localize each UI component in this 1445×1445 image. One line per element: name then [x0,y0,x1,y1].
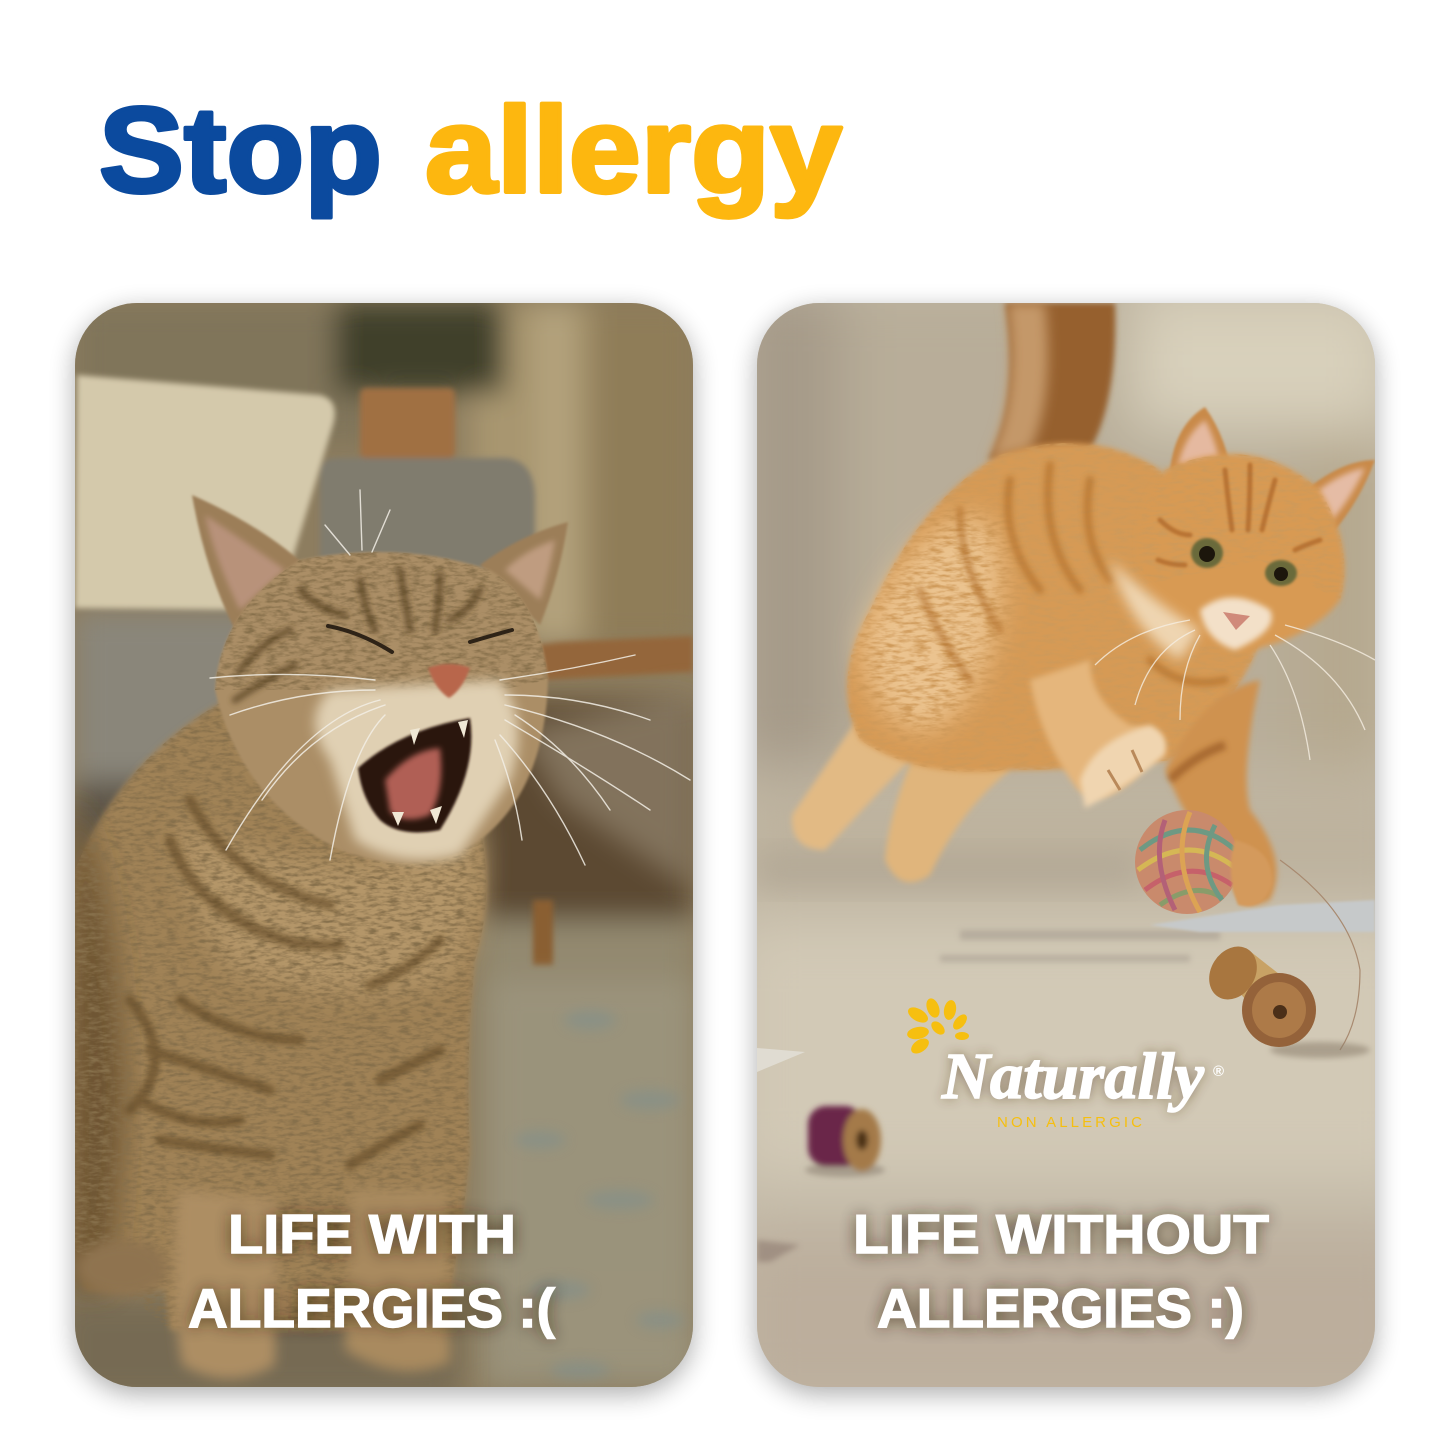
hind legs [790,723,908,852]
logo: Naturally Non Allergic [905,997,1224,1131]
caption: life without allergies: ALLERGIES :) [877,1277,1244,1339]
logo: Naturally Non Allergic: Naturally [941,1040,1205,1113]
front legs [1028,660,1144,796]
nose [1223,612,1250,630]
whiskers [210,490,690,865]
body stripes [920,465,1225,682]
small spool blurred [805,1106,885,1177]
logo: Naturally Non Allergic: ® [1213,1063,1224,1080]
caption: life with allergies: ALLERGIES :( [188,1277,556,1339]
logo sun leaves [905,997,970,1057]
background: living room [60,303,693,1400]
sneeze spray [520,690,693,890]
cat head [215,552,548,863]
closed eyes [328,626,512,652]
title [99,82,842,218]
whiskers [1095,620,1375,760]
cat stripes [130,800,440,1165]
cat tail [988,303,1115,460]
yarn ball [1135,810,1360,1050]
toe lines [1108,750,1142,790]
eyes [1191,538,1223,568]
head stripes [1158,465,1320,565]
open mouth [358,718,471,832]
caption: life with allergies [188,1203,556,1339]
logo: Naturally Non Allergic: Naturally [941,1040,1205,1113]
caption: life without allergies [853,1203,1269,1339]
title: allergy [425,82,842,218]
cat ears [192,495,305,630]
caption: life with allergies: LIFE WITH [228,1203,516,1265]
caption: life without allergies: LIFE WITHOUT [853,1203,1269,1265]
panel: life with allergies [60,303,693,1400]
logo: Naturally Non Allergic: NON ALLERGIC [997,1114,1142,1131]
cat body [847,443,1260,772]
cat body [75,700,486,1330]
panel: life without allergies [730,280,1430,1410]
caption: life with allergies: LIFE WITH [228,1203,516,1265]
sneezing tabby cat [70,490,690,1378]
nose [428,664,470,698]
background: bright room [757,303,1375,1387]
title: Stop [99,82,382,218]
playful orange cat [792,303,1375,904]
caption: life without allergies: ALLERGIES :) [877,1277,1244,1339]
cat ears [1169,406,1228,469]
cat legs and paws [76,1190,450,1378]
cat head [1138,454,1344,652]
wooden spool large [1209,946,1371,1060]
caption: life with allergies: ALLERGIES :( [188,1277,556,1339]
head stripes [235,570,480,700]
caption: life without allergies: LIFE WITHOUT [853,1203,1269,1265]
